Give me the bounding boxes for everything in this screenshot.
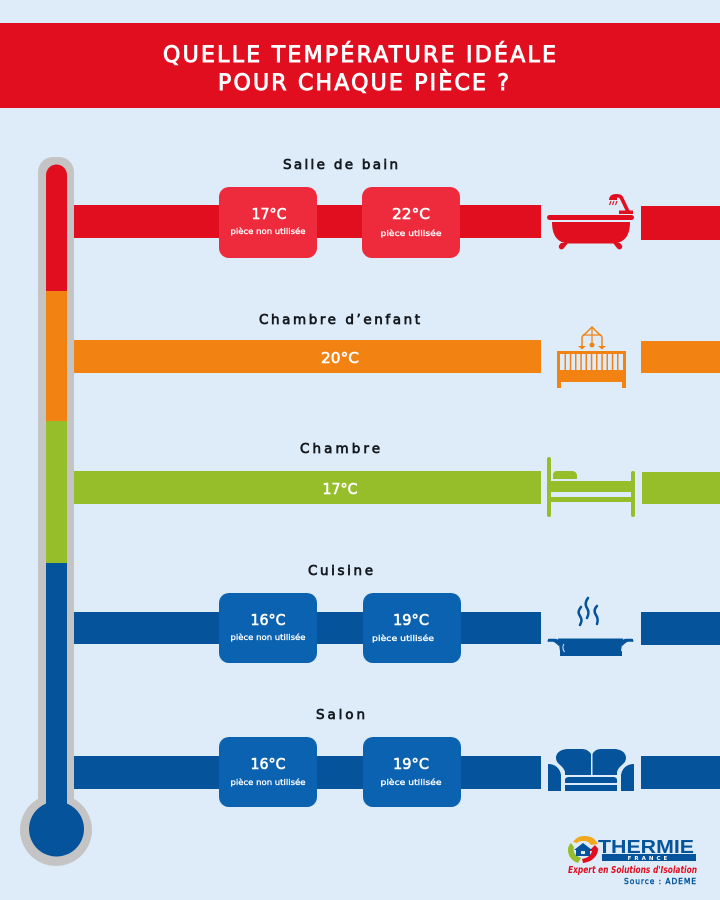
title banner: QUELLE TEMPÉRATURE IDÉALE — [163, 42, 556, 68]
title banner — [0, 23, 720, 108]
box: 16°C pièce non utilisée: pièce non utilisée — [230, 632, 306, 642]
box: 19°C pièce utilisée — [363, 737, 461, 807]
box: 19°C pièce utilisée: 19°C — [393, 755, 429, 773]
logo France bar: FRANCE — [628, 856, 670, 862]
box: 17°C pièce non utilisée: pièce non utilisée — [230, 226, 306, 236]
box: 16°C pièce non utilisée — [219, 737, 317, 807]
temperature bar: green — [74, 471, 720, 504]
row: cuisine — [74, 563, 720, 663]
heading: salle de bain: Salle de bain — [283, 157, 398, 173]
box: 17°C pièce non utilisée: 17°C — [252, 205, 286, 223]
box: 17°C pièce non utilisée — [219, 187, 317, 258]
row: chambre — [74, 441, 720, 517]
heading: salon: Salon — [316, 707, 365, 723]
box: 16°C pièce non utilisée: 16°C — [250, 611, 286, 629]
box: 22°C pièce utilisée: 22°C — [392, 205, 430, 223]
logo emblem — [568, 836, 600, 863]
icon: sofa — [548, 749, 634, 791]
logo: Thermie France — [568, 836, 697, 876]
icon: steaming pan — [547, 598, 634, 656]
temperature bar: orange — [74, 340, 720, 373]
temperature bar: blue — [74, 612, 720, 645]
title banner: POUR CHAQUE PIÈCE ? — [218, 70, 509, 96]
box: 19°C pièce utilisée — [363, 593, 461, 663]
box: 19°C pièce utilisée: 19°C — [393, 611, 429, 629]
row: salon — [74, 707, 720, 807]
thermometer — [20, 157, 92, 866]
heading: chambre d'enfant: Chambre d’enfant — [259, 312, 420, 328]
icon: crib with mobile — [557, 327, 626, 388]
temperature bar: red — [74, 205, 720, 240]
icon: bed — [547, 457, 635, 517]
heading: cuisine: Cuisine — [308, 563, 373, 579]
box: 22°C pièce utilisée: pièce utilisée — [380, 228, 442, 238]
icon: bathtub — [547, 194, 634, 249]
row: salle de bain — [74, 157, 720, 258]
temperature: 20°C: 20°C — [321, 349, 359, 367]
heading: chambre: Chambre — [300, 441, 380, 457]
box: 16°C pièce non utilisée: pièce non utilisée — [230, 777, 306, 787]
row: chambre d'enfant — [74, 312, 720, 388]
logo wordmark: THERMIE — [598, 837, 694, 857]
temperature bar: blue — [74, 756, 720, 789]
box: 16°C pièce non utilisée — [219, 593, 317, 663]
source: Source : ADEME — [624, 877, 696, 886]
box: 19°C pièce utilisée: pièce utilisée — [380, 777, 442, 787]
box: 19°C pièce utilisée: pièce utilisée — [372, 633, 434, 643]
box: 22°C pièce utilisée — [362, 187, 460, 258]
temperature: 17°C: 17°C — [322, 480, 358, 498]
box: 16°C pièce non utilisée: 16°C — [250, 755, 286, 773]
